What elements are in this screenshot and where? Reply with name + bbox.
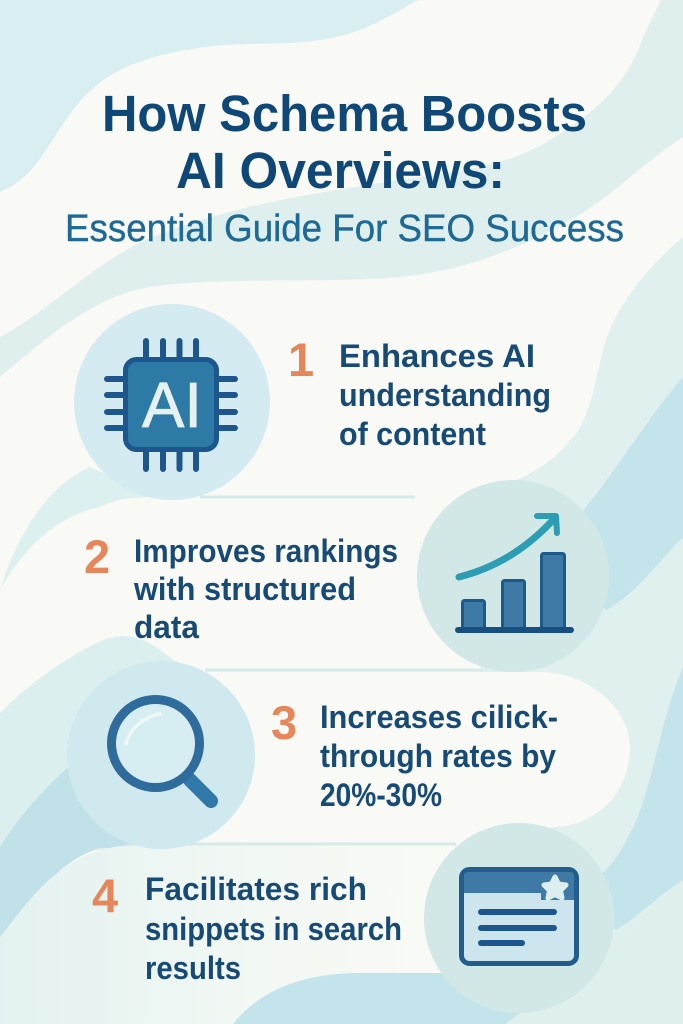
subtitle: Essential Guide For SEO Success <box>65 208 624 250</box>
text: item 1: understanding <box>339 377 551 413</box>
text: item 4: results <box>145 950 241 986</box>
text: item 4: snippets in search <box>145 911 402 947</box>
text: item 1 <box>339 338 551 452</box>
text: item 2: Improves rankings <box>134 533 398 569</box>
icon: magnifying glass <box>67 661 255 849</box>
panel: item 3 <box>67 661 558 849</box>
number 3: 3 <box>271 696 297 749</box>
number 2: 2 <box>84 530 110 583</box>
text: item 2 <box>133 533 398 645</box>
text: item 4 <box>145 871 402 986</box>
text: item 4: Facilitates rich <box>145 871 367 907</box>
text: item 1: Enhances AI <box>339 338 535 374</box>
text: item 2: with structured <box>133 571 356 607</box>
text: item 3: through rates by <box>320 738 556 774</box>
text: item 3: Increases cilick- <box>320 699 558 735</box>
text: item 3 <box>320 699 558 813</box>
title <box>102 85 587 199</box>
title: AI Overviews: <box>176 142 505 199</box>
number 1: 1 <box>288 333 314 386</box>
text: item 1: of content <box>339 416 486 452</box>
icon: growth chart <box>417 480 609 672</box>
icon: rich snippet window <box>424 823 614 1013</box>
icon: AI chip <box>74 304 270 500</box>
panel: item 4 <box>92 823 614 1013</box>
icon: AI chip: AI <box>142 369 202 441</box>
text: item 3: 20%-30% <box>320 777 442 813</box>
title: How Schema Boosts <box>102 85 587 142</box>
text: item 2: data <box>134 609 199 645</box>
panel: item 2 <box>84 480 609 672</box>
panel: item 1 <box>74 304 551 500</box>
number 4: 4 <box>92 869 118 922</box>
